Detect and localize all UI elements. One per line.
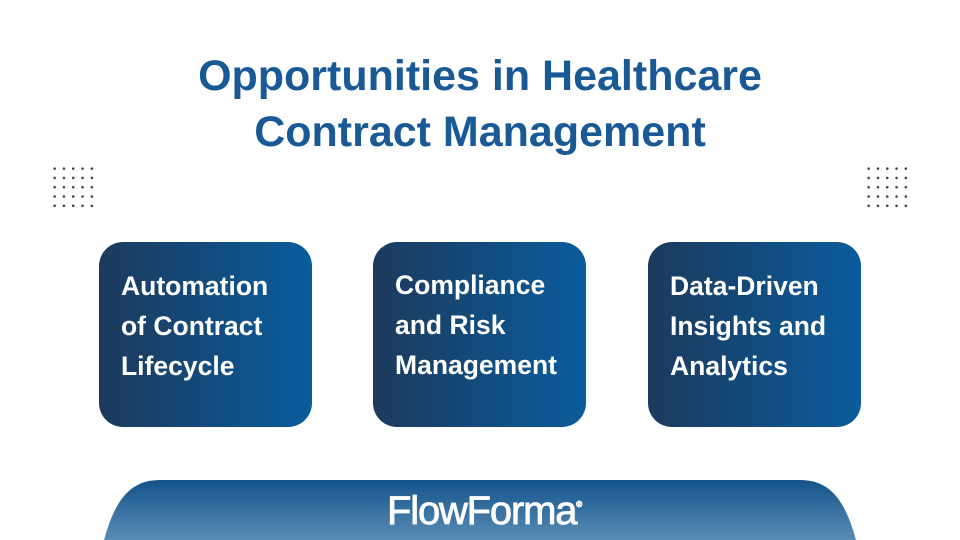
footer logo band xyxy=(104,480,856,540)
card: automation xyxy=(99,242,312,427)
decorative dots right xyxy=(864,164,910,208)
title: Contract Management xyxy=(254,108,706,156)
card: automation: Lifecycle xyxy=(121,351,234,381)
logo text: ® xyxy=(576,500,582,509)
title xyxy=(198,52,762,156)
card: data-driven xyxy=(648,242,861,427)
card: compliance: Compliance xyxy=(395,270,545,300)
card: compliance: Management xyxy=(395,350,557,380)
logo text: FlowForma xyxy=(387,489,576,533)
card: data-driven: Insights and xyxy=(670,311,826,341)
card: compliance xyxy=(373,242,586,427)
card: data-driven: Analytics xyxy=(670,351,788,381)
card: automation: Automation xyxy=(121,271,268,301)
card: automation: of Contract xyxy=(121,311,262,341)
decorative dots left xyxy=(50,164,96,208)
title: Opportunities in Healthcare xyxy=(198,52,762,100)
card: data-driven: Data-Driven xyxy=(670,271,819,301)
card: compliance: and Risk xyxy=(395,310,505,340)
